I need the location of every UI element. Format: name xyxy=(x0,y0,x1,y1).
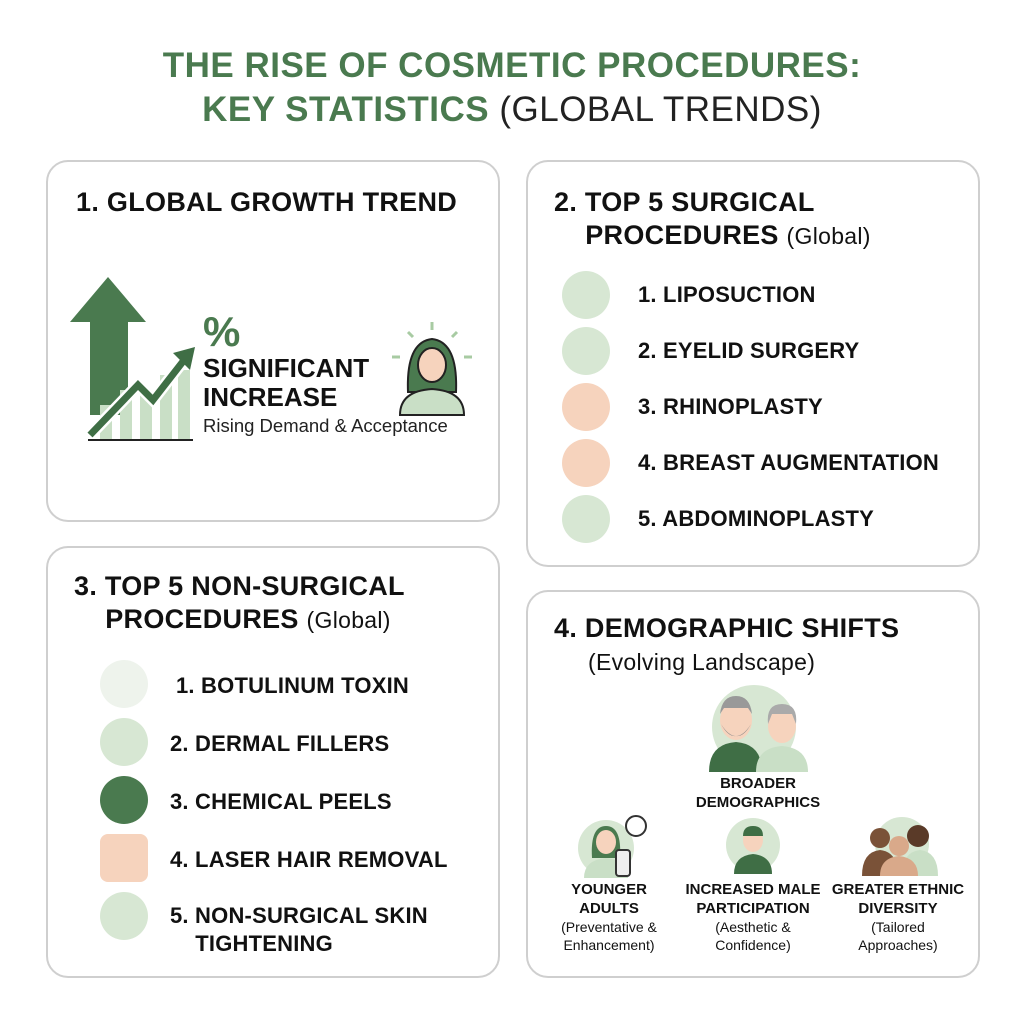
group: younger adults: Enhancement) xyxy=(563,937,655,953)
icon: older couple xyxy=(709,685,808,772)
list: non-surgical: 2. DERMAL FILLERS xyxy=(170,731,389,756)
chart icon: arrow and bars xyxy=(70,277,195,441)
heading: PROCEDURES (Global) xyxy=(585,220,871,250)
group: male participation: (Aesthetic & xyxy=(715,919,791,935)
group: younger adults: ADULTS xyxy=(579,900,639,917)
panel: surgical xyxy=(526,160,980,567)
label: broader demographics: BROADER xyxy=(720,775,796,792)
list: surgical xyxy=(562,271,939,543)
heading: 2. TOP 5 SURGICAL xyxy=(554,187,815,217)
percent stat text: Rising Demand & Acceptance xyxy=(203,415,448,436)
label: broader demographics: DEMOGRAPHICS xyxy=(696,794,820,811)
percent stat text xyxy=(203,308,448,436)
panel: demographics xyxy=(526,590,980,978)
percent stat text: SIGNIFICANT xyxy=(203,353,369,383)
group: ethnic diversity: Approaches) xyxy=(858,937,938,953)
title xyxy=(163,46,861,129)
list: surgical: 4. BREAST AUGMENTATION xyxy=(638,450,939,475)
group: ethnic diversity: DIVERSITY xyxy=(858,900,938,917)
group: male participation: Confidence) xyxy=(715,937,791,953)
list: surgical: 3. RHINOPLASTY xyxy=(638,394,823,419)
list: surgical: 2. EYELID SURGERY xyxy=(638,338,859,363)
label: broader demographics xyxy=(696,775,820,811)
list: non-surgical: 5. NON-SURGICAL SKIN xyxy=(170,903,428,928)
heading xyxy=(554,187,871,250)
heading: 3. TOP 5 NON-SURGICAL xyxy=(74,571,405,601)
heading xyxy=(554,613,899,675)
list: surgical: 5. ABDOMINOPLASTY xyxy=(638,506,874,531)
group: male participation: PARTICIPATION xyxy=(696,900,810,917)
panel: non-surgical xyxy=(46,546,500,978)
list: non-surgical: 3. CHEMICAL PEELS xyxy=(170,789,392,814)
heading: (Evolving Landscape) xyxy=(588,649,815,675)
heading: PROCEDURES (Global) xyxy=(105,604,391,634)
title: THE RISE OF COSMETIC PROCEDURES: xyxy=(163,46,861,85)
group: ethnic diversity xyxy=(832,817,964,953)
list: non-surgical: 1. BOTULINUM TOXIN xyxy=(176,673,409,698)
percent stat text: INCREASE xyxy=(203,382,337,412)
heading xyxy=(74,571,405,634)
list: non-surgical xyxy=(100,660,448,956)
group: younger adults xyxy=(561,815,657,953)
group: younger adults: (Preventative & xyxy=(561,919,657,935)
group: younger adults: YOUNGER xyxy=(571,881,647,898)
title: KEY STATISTICS (GLOBAL TRENDS) xyxy=(202,90,822,129)
panel: global growth xyxy=(46,160,500,522)
group: male participation: INCREASED MALE xyxy=(685,881,820,898)
list: non-surgical: 4. LASER HAIR REMOVAL xyxy=(170,847,448,872)
list: surgical: 1. LIPOSUCTION xyxy=(638,282,816,307)
list: non-surgical: TIGHTENING xyxy=(195,931,333,956)
icon: woman xyxy=(392,322,472,416)
group: ethnic diversity: (Tailored xyxy=(871,919,925,935)
heading: 4. DEMOGRAPHIC SHIFTS xyxy=(554,613,899,643)
percent stat text: % xyxy=(203,308,240,355)
heading: 1. GLOBAL GROWTH TREND xyxy=(76,187,457,217)
group: male participation xyxy=(685,818,820,953)
group: ethnic diversity: GREATER ETHNIC xyxy=(832,881,964,898)
